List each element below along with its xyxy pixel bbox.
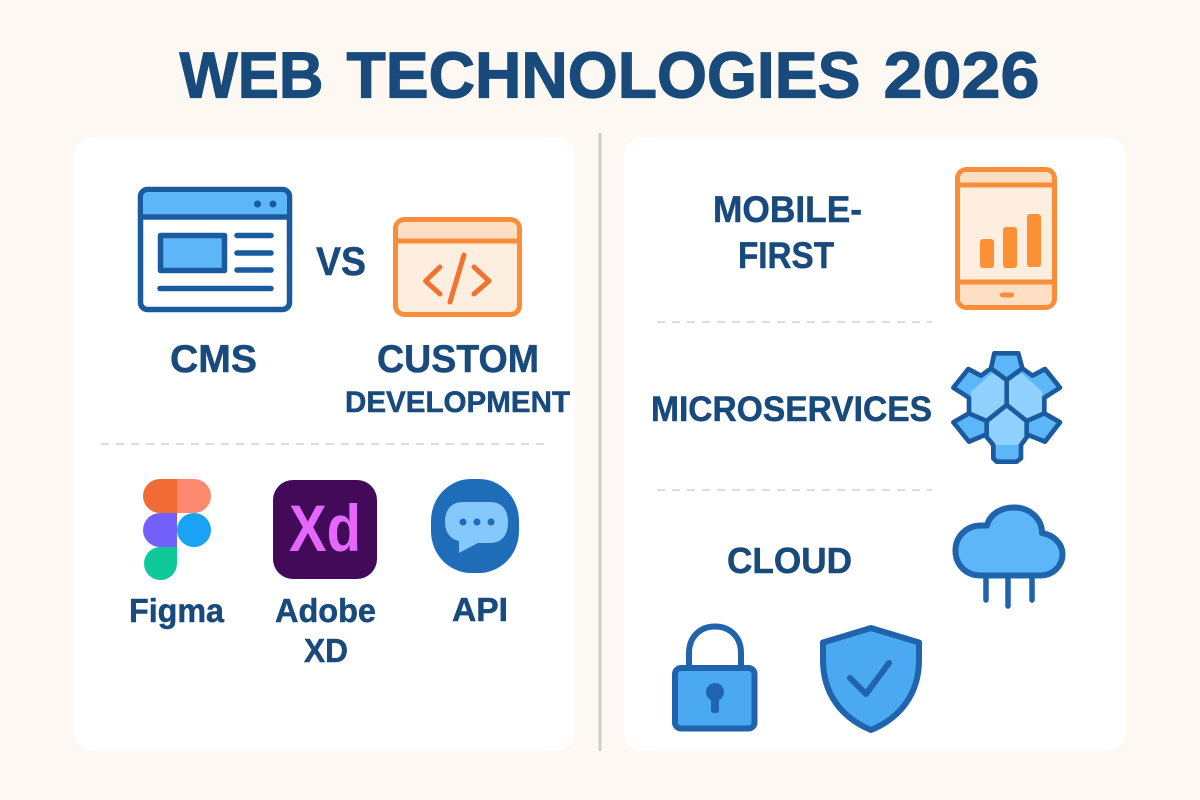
label: mobile-first	[713, 189, 862, 276]
label: CMS: CMS	[170, 338, 257, 381]
icon: padlock	[675, 626, 754, 728]
icon: cloud	[956, 508, 1062, 606]
title	[180, 39, 1040, 112]
label: mobile-first: MOBILE-	[713, 189, 862, 230]
label: Figma: Figma	[129, 592, 225, 629]
title: WEB	[180, 39, 324, 112]
label: mobile-first: FIRST	[738, 235, 834, 276]
icon: CMS browser window	[140, 190, 290, 310]
icon: Figma logo	[143, 479, 211, 580]
label: Adobe XD	[275, 592, 376, 669]
label: custom development	[345, 338, 570, 419]
title: TECHNOLOGIES	[346, 39, 860, 112]
label: microservices: MICROSERVICES	[651, 390, 932, 429]
label: Adobe XD: XD	[304, 632, 348, 669]
icon: API chat bubble	[431, 479, 519, 573]
icon: microservices gear	[953, 353, 1060, 462]
label: custom development: DEVELOPMENT	[345, 386, 570, 419]
icon: Adobe XD logo: Xd	[289, 491, 361, 565]
icon: custom code window	[395, 220, 520, 314]
label: cloud: CLOUD	[727, 540, 852, 581]
title: 2026	[884, 39, 1040, 112]
icon: security shield with check	[823, 628, 919, 730]
label: Adobe XD: Adobe	[275, 592, 376, 629]
panel: CMS vs custom development and design tools	[73, 137, 575, 751]
label: custom development: CUSTOM	[377, 338, 539, 381]
label: API: API	[452, 591, 508, 628]
icon: tablet with bar chart	[957, 170, 1055, 308]
panel: architecture trends and security	[624, 137, 1126, 751]
label: VS: VS	[316, 240, 366, 284]
icon: Adobe XD logo	[273, 480, 377, 579]
